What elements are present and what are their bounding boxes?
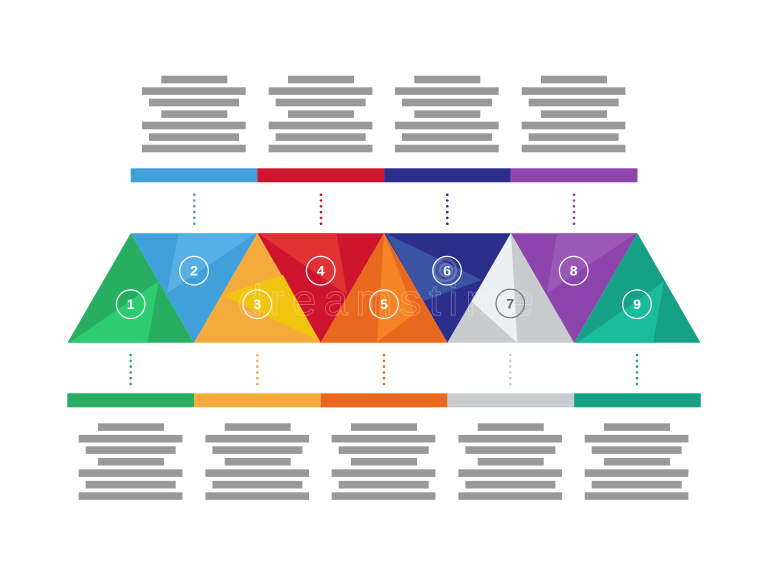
watermark logo: spiral rings bbox=[434, 259, 456, 281]
badge 1: 1 bbox=[127, 296, 135, 312]
badge 3 bbox=[243, 290, 272, 319]
badge 6 bbox=[433, 256, 461, 285]
text block: top column 1 bbox=[142, 76, 246, 152]
badge 8 bbox=[559, 256, 588, 285]
triangle 2: blue bbox=[131, 233, 257, 343]
text block: top column 2 bbox=[269, 76, 372, 152]
dotted connector: segment 6 bbox=[446, 195, 449, 224]
dotted connector: segment 9 bbox=[636, 355, 638, 385]
badge 5: 5 bbox=[380, 296, 388, 312]
dotted connector: segment 2 bbox=[193, 195, 196, 224]
badge 2 bbox=[180, 256, 208, 285]
text block: bottom column 1 bbox=[79, 423, 182, 500]
badge 4: 4 bbox=[317, 263, 325, 279]
text block: bottom column 5 bbox=[585, 423, 688, 500]
badge 6: 6 bbox=[443, 263, 451, 279]
dotted connector: segment 3 bbox=[256, 355, 259, 385]
dotted connector: segment 1 bbox=[129, 355, 132, 385]
triangle 8: purple bbox=[511, 233, 638, 343]
text block: bottom column 2 bbox=[205, 423, 309, 500]
triangle 7: silver bbox=[447, 233, 574, 343]
text block: bottom column 4 bbox=[458, 423, 562, 500]
text block: top column 3 bbox=[395, 76, 499, 152]
badge 4 bbox=[306, 256, 335, 285]
triangle 5: orange bbox=[321, 233, 447, 343]
triangle 1: green bbox=[68, 233, 194, 343]
badge 9 bbox=[623, 290, 651, 319]
badge 9: 9 bbox=[633, 296, 641, 312]
watermark: dreamstime bbox=[238, 276, 534, 325]
dotted connector: segment 7 bbox=[509, 355, 512, 385]
badge 2: 2 bbox=[190, 263, 198, 279]
triangle 3: orange-yellow bbox=[194, 233, 321, 343]
triangle 6: navy bbox=[384, 233, 511, 343]
dotted connector: segment 8 bbox=[573, 195, 575, 224]
badge 3: 3 bbox=[253, 296, 261, 312]
badge 5 bbox=[370, 290, 398, 319]
dotted connector: segment 5 bbox=[383, 355, 385, 385]
badge 7: 7 bbox=[506, 296, 514, 312]
triangle 4: red bbox=[257, 233, 384, 343]
top colour bar bbox=[131, 168, 637, 182]
triangle 9: teal bbox=[574, 233, 700, 343]
text block: top column 4 bbox=[522, 76, 625, 152]
badge 8: 8 bbox=[570, 263, 578, 279]
bottom colour bar bbox=[67, 393, 701, 407]
text block: bottom column 3 bbox=[332, 423, 435, 500]
badge 7 bbox=[496, 289, 525, 318]
badge 1 bbox=[116, 290, 145, 319]
dotted connector: segment 4 bbox=[320, 195, 322, 224]
